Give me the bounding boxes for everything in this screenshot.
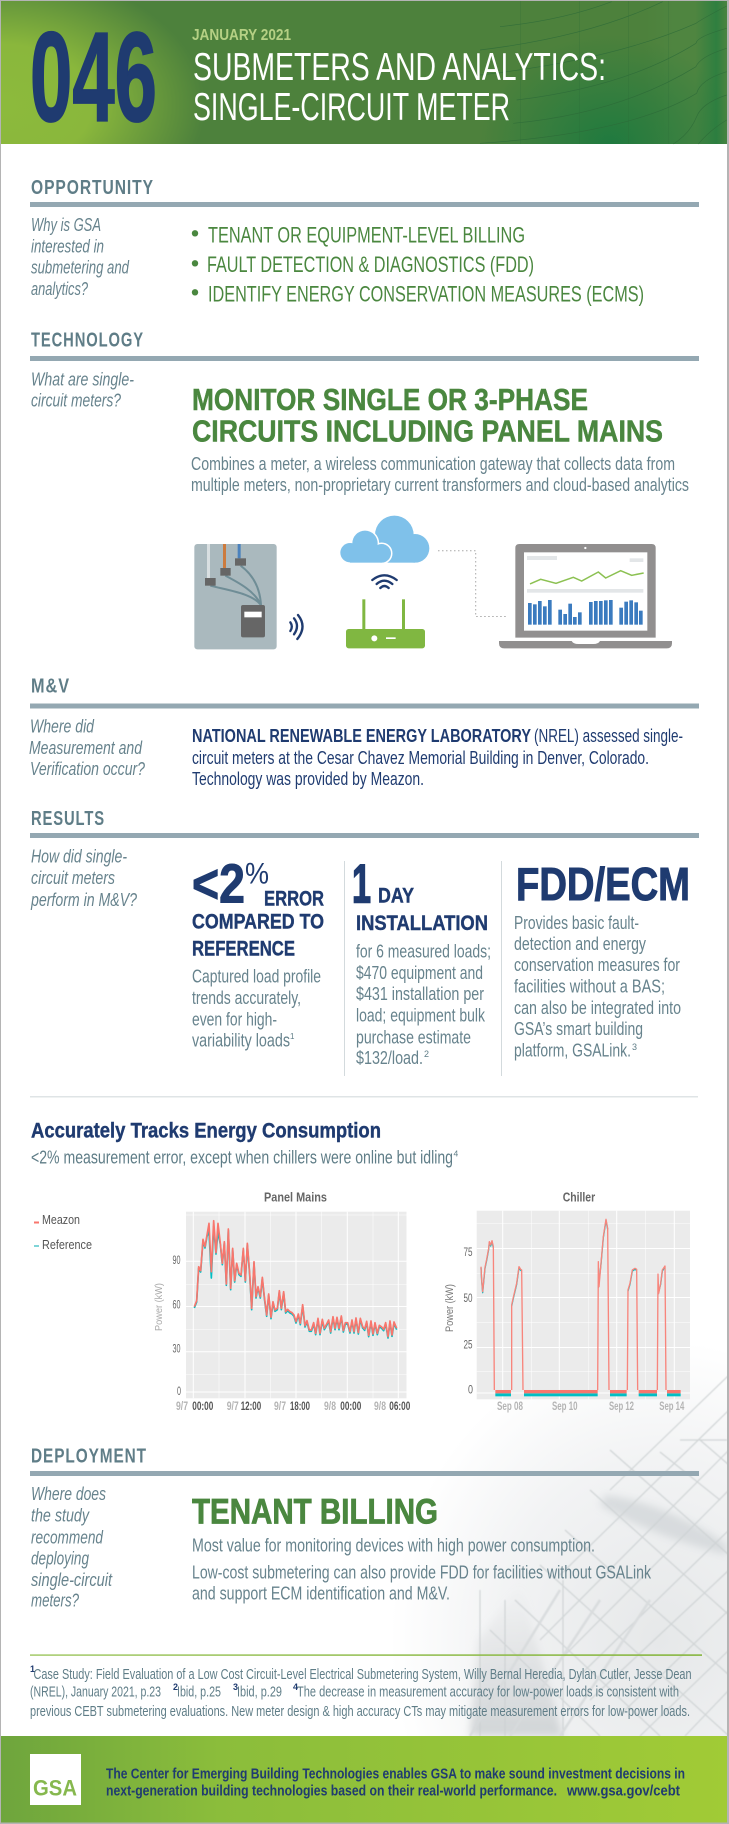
question: results	[30, 847, 137, 910]
deployment description: and support ECM identification and M&V.	[192, 1583, 450, 1603]
stat: error under 2 percent: Captured load profile	[192, 967, 321, 987]
stat: FDD/ECM: GSA’s smart building	[514, 1019, 643, 1039]
panel: M&V	[29, 676, 699, 789]
stat: error under 2 percent: <2	[192, 853, 245, 915]
footnotes: 2	[173, 1682, 178, 1692]
report number: 046	[30, 6, 157, 148]
chart: chiller: Sep 10	[552, 1401, 578, 1413]
deployment description	[192, 1536, 652, 1603]
chart: chiller	[444, 1190, 690, 1413]
question: deployment: meters?	[31, 1591, 79, 1611]
chart: panel mains: Power (kW)	[153, 1283, 165, 1331]
chart legend	[34, 1212, 92, 1252]
chart: panel mains: 30	[172, 1344, 180, 1356]
stat: FDD/ECM	[514, 858, 690, 1061]
question: deployment: recommend	[31, 1527, 104, 1547]
chart: panel mains: 00:00	[192, 1401, 213, 1413]
footnotes: 4	[293, 1682, 298, 1692]
icon: laptop dashboard	[499, 544, 672, 648]
stat: error under 2 percent: %	[245, 858, 269, 890]
chart: chiller: 50	[464, 1293, 472, 1305]
chart legend: Reference	[42, 1237, 92, 1252]
stat: 1 day installation: load; equipment bulk	[356, 1006, 486, 1026]
stat: error under 2 percent: REFERENCE	[192, 937, 295, 960]
stat: 1 day installation: $470 equipment and	[356, 963, 483, 983]
panel: energy consumption charts	[31, 1120, 690, 1413]
question: results: circuit meters	[31, 868, 115, 888]
question: deployment	[31, 1484, 113, 1611]
question: M&V: Where did	[30, 717, 95, 737]
question: M&V	[29, 717, 145, 779]
stat: error under 2 percent: even for high-	[192, 1010, 277, 1030]
question: deployment: deploying	[31, 1548, 89, 1568]
question: opportunity: submetering and	[31, 258, 130, 278]
question: deployment: Where does	[31, 1484, 106, 1504]
question: results: perform in M&V?	[30, 890, 137, 910]
footnotes: 1	[30, 1664, 35, 1674]
chart: panel mains: 9/7	[227, 1401, 239, 1413]
chart: chiller: Power (kW)	[444, 1284, 456, 1332]
chart: panel mains: 90	[172, 1255, 180, 1267]
question: technology	[31, 370, 134, 411]
icon: cloud	[340, 516, 429, 563]
stat: error under 2 percent: 1	[290, 1032, 295, 1041]
panel: deployment	[30, 1446, 699, 1611]
stat: FDD/ECM: platform, GSALink.	[514, 1041, 631, 1061]
footer statement: www.gsa.gov/cebt	[566, 1783, 680, 1800]
chart: panel mains: 60	[172, 1300, 180, 1312]
title	[193, 46, 606, 129]
stat: FDD/ECM: FDD/ECM	[516, 858, 690, 910]
chart: panel mains: 9/7	[274, 1401, 286, 1413]
stat: 1 day installation: 2	[424, 1049, 429, 1059]
chart legend: Meazon	[42, 1212, 80, 1227]
question: deployment: the study	[31, 1506, 90, 1526]
chart: panel mains: 18:00	[290, 1401, 310, 1413]
chart: panel mains: 12:00	[241, 1401, 261, 1413]
chart: chiller: 0	[468, 1384, 473, 1396]
chart subheading: <2% measurement error, except when chillers were online but idling	[31, 1147, 453, 1167]
footnotes: Ibid, p.29	[237, 1685, 282, 1701]
footer band	[0, 1736, 729, 1824]
technology headline: MONITOR SINGLE OR 3-PHASE	[192, 382, 588, 417]
GSA logo	[30, 1754, 81, 1805]
chart: panel mains: 0	[177, 1386, 181, 1398]
chart: panel mains	[153, 1190, 410, 1413]
stat: 1 day installation: for 6 measured loads;	[356, 942, 491, 962]
chart: chiller: Sep 12	[609, 1401, 634, 1413]
heading: opportunity: OPPORTUNITY	[31, 177, 154, 199]
M&V description	[192, 726, 683, 789]
question: opportunity	[31, 215, 130, 299]
M&V description: (NREL) assessed single-	[534, 726, 683, 746]
heading: M&V: M&V	[31, 676, 70, 698]
stat: FDD/ECM: conservation measures for	[514, 955, 680, 975]
chart: panel mains: Panel Mains	[264, 1190, 327, 1205]
panel: results	[30, 808, 699, 1076]
question: opportunity: Why is GSA	[31, 215, 101, 235]
footnotes: Ibid, p.25	[177, 1685, 221, 1701]
stat: error under 2 percent: trends accurately,	[192, 988, 301, 1008]
panel: technology	[30, 330, 699, 649]
header banner	[0, 0, 729, 148]
stat: 1 day installation: purchase estimate	[356, 1027, 471, 1047]
deployment headline: TENANT BILLING	[192, 1492, 438, 1531]
heading: results: RESULTS	[31, 808, 105, 830]
chart: chiller: Sep 08	[497, 1401, 523, 1413]
stat: error under 2 percent: ERROR	[264, 888, 324, 911]
question: opportunity: interested in	[31, 236, 104, 256]
question: technology: What are single-	[31, 370, 134, 390]
chart: chiller: Sep 14	[659, 1401, 685, 1413]
chart: chiller: 25	[464, 1339, 472, 1351]
dotted connector	[438, 551, 507, 616]
footnotes: (NREL), January 2021, p.23	[30, 1685, 161, 1701]
stat: FDD/ECM: detection and energy	[514, 934, 646, 954]
chart: panel mains: 9/7	[176, 1401, 188, 1413]
M&V description: NATIONAL RENEWABLE ENERGY LABORATORY	[192, 726, 531, 746]
icon: gateway router	[346, 599, 425, 648]
stat: 1 day installation: $132/load.	[356, 1048, 423, 1068]
footnotes	[30, 1664, 692, 1720]
stat: 1 day installation: DAY	[378, 885, 414, 908]
technology headline: CIRCUITS INCLUDING PANEL MAINS	[192, 414, 663, 449]
icon: meter wireless signal	[290, 615, 303, 639]
bullet list: FAULT DETECTION & DIAGNOSTICS (FDD)	[207, 252, 534, 277]
chart: chiller: Chiller	[563, 1190, 595, 1205]
footer statement	[106, 1765, 685, 1800]
chart subheading: 4	[454, 1148, 458, 1158]
footnotes: 3	[233, 1682, 238, 1692]
question: results: How did single-	[31, 847, 127, 867]
chart heading: Accurately Tracks Energy Consumption	[31, 1120, 381, 1143]
chart: panel mains: 9/8	[374, 1401, 386, 1413]
bullet list: TENANT OR EQUIPMENT-LEVEL BILLING	[208, 223, 525, 248]
bullet list	[192, 223, 644, 307]
heading: technology: TECHNOLOGY	[31, 330, 144, 352]
chart: panel mains: 9/8	[324, 1401, 336, 1413]
stat: 1 day installation: $431 installation per	[356, 984, 484, 1004]
title: SINGLE-CIRCUIT METER	[193, 86, 510, 129]
chart: panel mains: 00:00	[340, 1401, 361, 1413]
chart: panel mains: 06:00	[389, 1401, 410, 1413]
stat: FDD/ECM: Provides basic fault-	[514, 913, 639, 933]
deployment description: Most value for monitoring devices with high power consumption.	[192, 1536, 595, 1556]
M&V description: Technology was provided by Meazon.	[192, 769, 424, 789]
question: M&V: Verification occur?	[30, 759, 145, 779]
heading: deployment: DEPLOYMENT	[31, 1446, 147, 1468]
stat: FDD/ECM: can also be integrated into	[514, 998, 681, 1018]
stat: error under 2 percent: COMPARED TO	[192, 910, 324, 933]
chart: chiller: 75	[464, 1247, 472, 1259]
stat: 1 day installation: INSTALLATION	[356, 912, 488, 935]
footer statement: next-generation building technologies based on their real-world performance.	[106, 1783, 557, 1800]
stat: error under 2 percent: variability loads	[192, 1031, 290, 1051]
stat: 1 day installation	[352, 853, 491, 1068]
stat: error under 2 percent	[192, 853, 324, 1051]
question: deployment: single-circuit	[31, 1570, 113, 1590]
stat: 1 day installation: 1	[352, 853, 371, 915]
stat: FDD/ECM: facilities without a BAS;	[514, 977, 665, 997]
technology headline	[192, 382, 663, 449]
question: technology: circuit meters?	[31, 391, 121, 411]
date: JANUARY 2021	[192, 27, 291, 44]
question: M&V: Measurement and	[29, 738, 143, 758]
panel: opportunity	[30, 177, 699, 307]
technology description	[191, 454, 689, 495]
question: opportunity: analytics?	[31, 279, 88, 299]
GSA logo: GSA	[33, 1776, 77, 1801]
icon: electrical panel with meter	[194, 544, 277, 649]
stat: FDD/ECM: 3	[632, 1042, 637, 1052]
icon: gateway wifi signal	[372, 575, 397, 588]
